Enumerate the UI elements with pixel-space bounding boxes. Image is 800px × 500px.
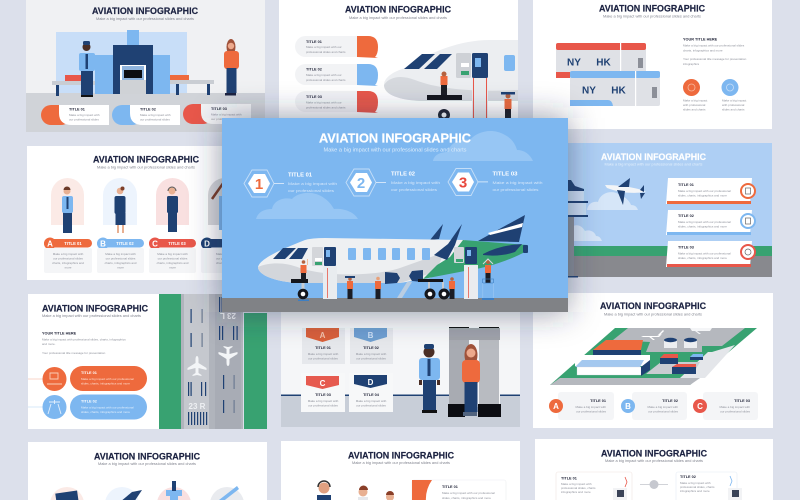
step 1 xyxy=(244,170,337,197)
ticket: red xyxy=(556,43,646,78)
list item 02 xyxy=(295,64,378,86)
ground xyxy=(222,298,568,312)
item 01 xyxy=(28,366,147,391)
option C: C xyxy=(320,379,326,388)
crew C xyxy=(149,178,196,273)
card: title 01: TITLE 01 xyxy=(69,108,85,112)
icon: plane left xyxy=(188,356,206,376)
card B xyxy=(621,392,687,420)
connector xyxy=(640,480,668,489)
text block xyxy=(683,38,747,66)
text block: charts, infographics and more xyxy=(683,48,723,52)
title: AVIATION INFOGRAPHIC xyxy=(92,6,198,17)
crew D: Make a xyxy=(216,252,226,256)
text block: Make a big impact with our professional slides xyxy=(683,44,745,48)
panel: runway slide xyxy=(28,294,267,429)
front stairs xyxy=(323,266,337,299)
crew A: A xyxy=(47,240,53,248)
option D: TITLE 04 xyxy=(363,393,380,397)
card: title 01: slides, charts, infographics and more xyxy=(678,194,727,198)
step 3: our professional slides xyxy=(492,187,538,192)
panel: body scanner slide xyxy=(281,312,520,427)
option D: our professional slides xyxy=(356,404,386,408)
ticket: blue xyxy=(570,71,660,106)
text block xyxy=(42,332,126,355)
card: title 01 xyxy=(666,178,755,204)
card B: B xyxy=(625,402,631,411)
worker 3 xyxy=(375,277,381,299)
subtitle: Make a big impact with our professional slides and charts xyxy=(96,17,194,21)
card A: TITLE 01 xyxy=(590,399,606,403)
crew D: charts, xyxy=(216,261,225,265)
step 3: 3 xyxy=(459,174,467,192)
staff figures xyxy=(317,481,394,500)
option D: Make a big impact with xyxy=(356,399,387,403)
card: title 02: Make a big impact with xyxy=(680,481,711,485)
card: title 03: TITLE 03 xyxy=(211,107,227,111)
crew D: our pro xyxy=(216,256,226,260)
card: title 01: Make a big impact with our professional xyxy=(442,491,495,495)
clouds xyxy=(573,192,638,241)
option D xyxy=(349,373,393,412)
hangars xyxy=(660,358,678,364)
list item 03: professional slides and charts xyxy=(306,106,346,110)
card: title 02 xyxy=(666,210,755,235)
card: title 01 xyxy=(556,472,632,500)
airplane xyxy=(258,215,528,298)
icon: orange circle: slides and charts xyxy=(683,108,706,112)
crew A: TITLE 01 xyxy=(64,241,82,246)
step 1: 1 xyxy=(255,176,263,193)
card: title 01 xyxy=(412,480,506,500)
rear landing gear xyxy=(418,279,450,300)
text block: Your professional title message for presentation xyxy=(683,57,747,61)
worker 4 xyxy=(449,277,455,299)
option A: TITLE 01 xyxy=(315,346,331,350)
option A xyxy=(302,328,345,364)
item 01: TITLE 01 xyxy=(81,371,97,375)
crew B: TITLE 02 xyxy=(116,241,134,246)
panel: QR slide xyxy=(535,439,773,500)
card: title 01 xyxy=(41,105,109,125)
crew C: C xyxy=(152,240,158,248)
plane close-up xyxy=(384,40,518,121)
crew C: Make a big impact with xyxy=(157,252,188,256)
item 01: slides, charts, infographics and more xyxy=(81,382,130,386)
card B: Make a big impact with xyxy=(647,405,678,409)
crew B: B xyxy=(100,240,106,248)
panel: airport map slide xyxy=(533,293,773,428)
title: AVIATION INFOGRAPHIC xyxy=(93,154,199,166)
text block: Make a big impact with professional slides, charts, infographics xyxy=(42,338,126,342)
airplane xyxy=(605,178,646,205)
list item 01 xyxy=(295,36,378,58)
card: title 02: slides, charts, infographics and more xyxy=(678,224,727,228)
runway markings: 23 R xyxy=(189,402,206,411)
crew C: charts, infographics and xyxy=(157,261,189,265)
card: title 02: our professional slides xyxy=(140,118,170,122)
crew B: more xyxy=(117,266,124,270)
card A: our professional slides xyxy=(576,410,606,414)
card: title 02: TITLE 02 xyxy=(140,108,156,112)
panel: staff slide xyxy=(281,441,520,500)
text block: and more. xyxy=(42,342,56,346)
rear stairs xyxy=(464,265,478,299)
card: title 02 xyxy=(112,105,180,125)
icon: blue circle: Make a big impact xyxy=(722,98,747,102)
panel: crew slide xyxy=(27,146,222,280)
card B: TITLE 02 xyxy=(662,399,678,403)
worker 5 on lift xyxy=(482,259,494,300)
card: title 01: professional slides, charts xyxy=(561,486,596,490)
crew B: our professional slides xyxy=(106,256,136,260)
option A: our professional slides xyxy=(308,356,338,360)
title: AVIATION INFOGRAPHIC xyxy=(94,452,200,462)
card: title 01: TITLE 01 xyxy=(678,183,694,187)
text block: Your professional title message for presentation xyxy=(42,351,106,355)
item 02: TITLE 02 xyxy=(81,400,97,404)
icon: blue circle: with professional xyxy=(722,103,745,107)
card: title 01: Make a big impact with xyxy=(69,113,100,117)
card C xyxy=(693,392,758,420)
step 1: our professional slides xyxy=(288,188,334,193)
step 2 xyxy=(346,169,440,196)
card B: our professional slides xyxy=(648,410,678,414)
panel: control tower slide xyxy=(567,143,772,278)
person: passenger xyxy=(462,344,480,416)
list item 02: Make a big impact with our xyxy=(306,73,342,77)
subtitle: Make a big impact with our professional slides and charts xyxy=(604,162,703,166)
crew A xyxy=(44,178,92,273)
panel: icons slide xyxy=(28,442,267,500)
cloud: top right xyxy=(433,131,533,161)
crew A: our professional slides xyxy=(53,256,83,260)
step 2: 2 xyxy=(357,175,365,192)
parked planes xyxy=(641,330,664,340)
step 1: TITLE 01 xyxy=(288,172,312,178)
title: AVIATION INFOGRAPHIC xyxy=(600,301,706,312)
subtitle: Make a big impact with our professional slides and charts xyxy=(349,16,447,20)
text block: YOUR TITLE HERE xyxy=(683,38,718,42)
subtitle: Make a big impact with our professional slides and charts xyxy=(603,14,701,18)
item 01: Make a big impact with our professional xyxy=(81,377,134,381)
card: title 03: Make a big impact with xyxy=(211,112,242,116)
card: title 02: Make a big impact with our professional xyxy=(678,220,731,224)
option A: Make a big impact with xyxy=(308,352,339,356)
icon: blue circle: slides and charts xyxy=(722,108,745,112)
title: AVIATION INFOGRAPHIC xyxy=(601,448,707,460)
card: title 01: Make a big impact with xyxy=(561,482,592,486)
crew A: Make a big impact with xyxy=(53,252,84,256)
card: title 01: TITLE 01 xyxy=(442,485,458,489)
subtitle: Make a big impact with our professional slides and charts xyxy=(605,459,703,463)
option A: A xyxy=(320,331,326,340)
worker on platform xyxy=(440,72,448,95)
crew B: Make a big impact with xyxy=(105,252,136,256)
card: title 03 xyxy=(666,241,755,267)
title: AVIATION INFOGRAPHIC xyxy=(319,130,472,146)
walk-through scanner xyxy=(448,327,501,417)
crew C: TITLE 03 xyxy=(168,241,186,246)
crew B xyxy=(97,178,144,273)
crew A: more xyxy=(65,266,72,270)
title: AVIATION INFOGRAPHIC xyxy=(42,304,148,314)
text block: infographics xyxy=(683,62,700,66)
option B: B xyxy=(368,331,374,340)
step 2: our professional slides xyxy=(391,187,437,192)
title: AVIATION INFOGRAPHIC xyxy=(601,152,706,163)
person: passenger xyxy=(224,39,239,96)
icons row xyxy=(50,481,244,500)
option B xyxy=(350,328,393,364)
card C: C xyxy=(697,402,703,411)
crew A: charts, infographics and xyxy=(52,261,84,265)
icon: blue circle xyxy=(722,79,747,112)
worker on ground xyxy=(501,92,515,118)
panel: main aviation slide xyxy=(222,118,568,312)
title: AVIATION INFOGRAPHIC xyxy=(345,4,451,16)
list item 01: Make a big impact with our xyxy=(306,45,342,49)
panel: boarding pass slide xyxy=(533,0,772,129)
option C: our professional slides xyxy=(308,404,338,408)
subtitle: Make a big impact with our professional slides and charts xyxy=(324,148,467,154)
subtitle: Make a big impact with our professional slides and charts xyxy=(97,166,195,170)
list item 03 xyxy=(295,91,378,113)
storage tanks xyxy=(664,340,677,348)
ticket: blue: HK xyxy=(611,86,626,96)
card C: our professional slides xyxy=(720,410,750,414)
crew D xyxy=(201,178,222,273)
ticket: blue: NY xyxy=(582,86,596,96)
panel: plane door slide xyxy=(279,0,518,121)
card C: Make a big impact with xyxy=(719,405,750,409)
list item 03: TITLE 03 xyxy=(306,95,322,99)
text block: YOUR TITLE HERE xyxy=(42,332,77,336)
subtitle: Make a big impact with our professional slides and charts xyxy=(98,462,196,466)
control tower xyxy=(567,180,588,278)
option B: Make a big impact with xyxy=(356,352,387,356)
step 2: TITLE 02 xyxy=(391,172,415,178)
title: AVIATION INFOGRAPHIC xyxy=(599,4,705,14)
isometric airport xyxy=(550,328,757,385)
card: title 01: infographics and more xyxy=(561,490,591,494)
option C xyxy=(301,373,345,412)
option B: our professional slides xyxy=(356,356,386,360)
runway markings xyxy=(184,294,241,429)
card: title 03: TITLE 03 xyxy=(678,246,694,250)
icon: orange circle: Make a big impact xyxy=(683,98,708,102)
card: title 01: our professional slides xyxy=(69,118,99,122)
step 3: Make a big impact with xyxy=(492,180,542,185)
item 02: Make a big impact with our professional xyxy=(81,406,134,410)
person: security officer xyxy=(79,41,95,97)
cloud: left xyxy=(256,193,358,219)
card: title 01: slides, charts, infographics and more xyxy=(442,496,491,500)
card: title 02: professional slides, charts xyxy=(680,485,715,489)
option D: D xyxy=(368,378,374,387)
list item 03: Make a big impact with our xyxy=(306,100,342,104)
card: title 03: Make a big impact with our professional xyxy=(678,252,731,256)
icon: plane right xyxy=(218,346,238,366)
scanner illustration xyxy=(52,30,214,96)
card A xyxy=(549,392,614,420)
worker 1 xyxy=(300,259,308,280)
list item 01: professional slides and charts xyxy=(306,50,346,54)
option B: TITLE 02 xyxy=(363,346,379,350)
crew B: charts, infographics and xyxy=(105,261,137,265)
card A: A xyxy=(553,402,559,411)
crew C: more xyxy=(169,266,176,270)
ticket: red: HK xyxy=(596,58,611,68)
list item 01: TITLE 01 xyxy=(306,40,322,44)
card: title 02: infographics and more xyxy=(680,489,710,493)
card: title 01: TITLE 01 xyxy=(561,476,577,480)
title: AVIATION INFOGRAPHIC xyxy=(348,450,454,462)
card C: TITLE 03 xyxy=(734,399,750,403)
option C: TITLE 03 xyxy=(315,393,331,397)
list item 02: professional slides and charts xyxy=(306,78,346,82)
card: title 01: Make a big impact with our professional xyxy=(678,189,731,193)
card: title 02: TITLE 02 xyxy=(680,475,696,479)
item 02 xyxy=(28,394,147,420)
icon: orange circle xyxy=(683,79,708,112)
person: officer xyxy=(419,344,440,413)
front landing gear xyxy=(291,279,309,301)
ticket: red: NY xyxy=(567,58,581,68)
card: title 03: our professional slides xyxy=(211,117,241,121)
step 3 xyxy=(448,168,542,196)
list item 02: TITLE 02 xyxy=(306,68,322,72)
terminal xyxy=(593,340,643,350)
card: title 03 xyxy=(183,104,251,124)
item 02: slides, charts, infographics and more xyxy=(81,410,130,414)
card: title 02: TITLE 02 xyxy=(678,214,694,218)
step 2: Make a big impact with xyxy=(391,180,440,185)
option C: Make a big impact with xyxy=(308,399,339,403)
worker 2 xyxy=(345,276,355,299)
card: title 02: Make a big impact with xyxy=(140,113,171,117)
icon: orange circle: with professional xyxy=(683,103,706,107)
crew C: our professional slides xyxy=(158,256,188,260)
panel: security scanner slide xyxy=(26,0,265,132)
step 3: TITLE 03 xyxy=(492,172,518,178)
card: title 02 xyxy=(676,472,742,500)
subtitle: Make a big impact with our professional slides and charts xyxy=(352,461,450,465)
step 1: Make a big impact with xyxy=(288,181,337,186)
crew D: D xyxy=(204,240,210,248)
subtitle: Make a big impact with our professional slides and charts xyxy=(604,312,702,316)
card: title 03: slides, charts, infographics and more xyxy=(678,256,727,260)
card A: Make a big impact with xyxy=(575,405,606,409)
subtitle: Make a big impact with our professional slides and charts xyxy=(42,314,141,318)
runway markings: 23 L xyxy=(220,311,236,320)
